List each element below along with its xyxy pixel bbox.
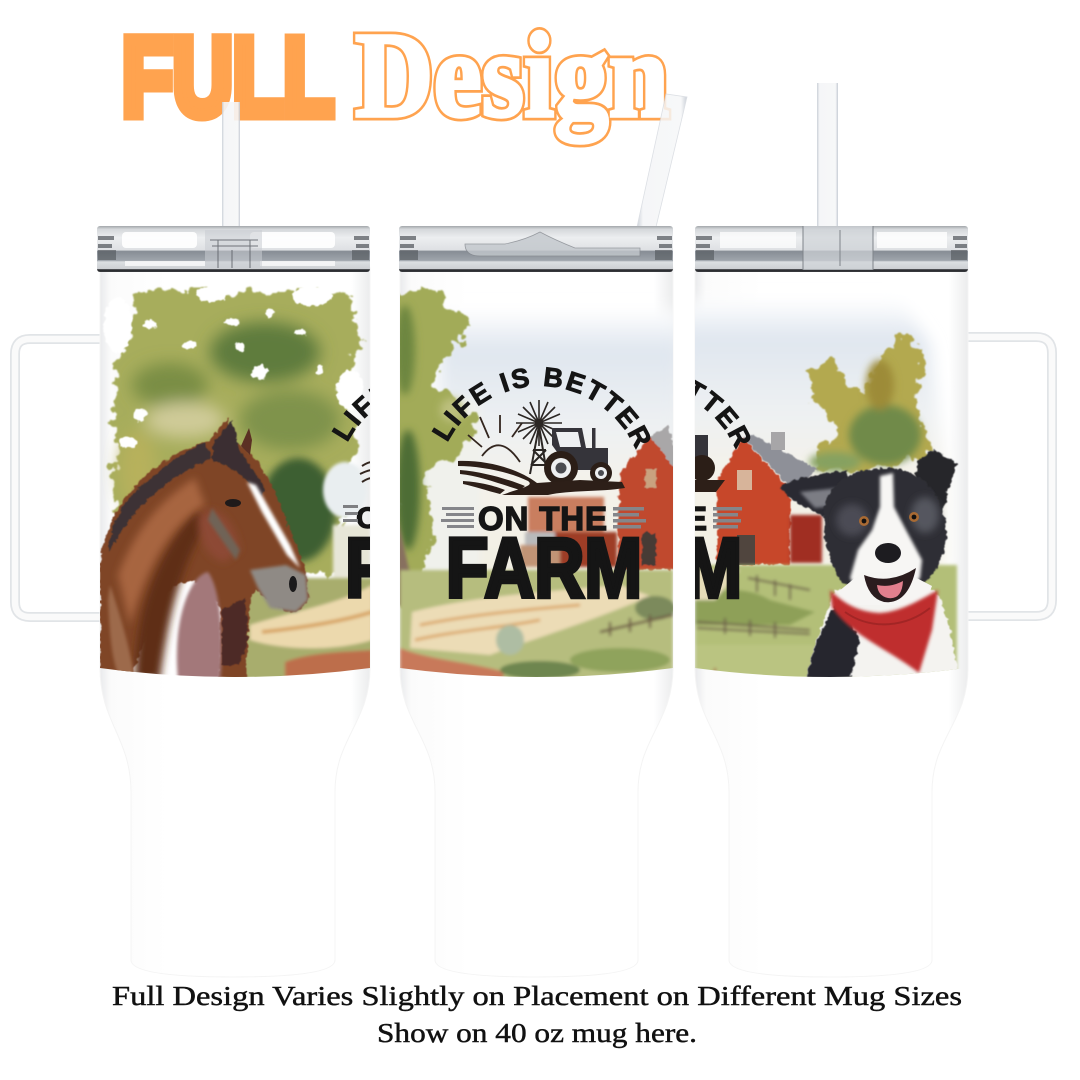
partial logo: BETTER / FARM: FARM <box>546 521 742 615</box>
plough furrows <box>458 461 625 495</box>
caption <box>112 981 962 1048</box>
printed artwork: horse and tree <box>100 286 370 677</box>
horse <box>100 418 309 680</box>
title word: Design: Design <box>355 8 669 143</box>
arc text: LIFE IS BETTER <box>432 366 650 450</box>
red barn <box>717 432 822 565</box>
tree <box>805 335 935 472</box>
ON THE: ON THE <box>478 500 607 537</box>
straw <box>817 83 838 227</box>
partial logo: BETTER / FARM: LIFE IS BETTER <box>695 380 750 450</box>
sun <box>468 415 522 462</box>
back barn <box>520 497 617 567</box>
speed lines <box>441 507 646 528</box>
mug 3: dog side <box>694 83 1057 978</box>
logo: Life Is Better On The Farm <box>432 366 650 600</box>
red barn <box>617 425 676 570</box>
partial logo: BETTER / FARM <box>695 380 750 600</box>
tumbler body <box>695 268 968 977</box>
partial logo: LIFE / FARM: LIFE IS BETTER <box>332 388 370 442</box>
windmill <box>516 400 562 474</box>
title word: Design: Design <box>355 8 669 143</box>
caption line 1: Full Design Varies Slightly on Placement on Different Mug Sizes <box>112 981 962 1011</box>
ground <box>225 578 375 683</box>
lid <box>695 226 968 272</box>
tractor <box>544 428 612 485</box>
tumbler body <box>100 268 370 977</box>
straw <box>222 102 240 227</box>
dog mouth and tongue <box>864 568 916 602</box>
red bandana <box>830 590 938 673</box>
mug 1: horse side <box>10 102 370 978</box>
distant sky gap and barn <box>323 462 370 580</box>
title: Full Design <box>122 8 669 143</box>
partial logo: BETTER / FARM: ON THE <box>578 500 707 537</box>
mug 2: logo front <box>399 94 688 978</box>
caption line 2: Show on 40 oz mug here. <box>377 1018 697 1048</box>
sky <box>440 310 680 590</box>
tumbler body <box>400 268 673 977</box>
partial logo: LIFE / FARM: FARM <box>345 521 543 615</box>
lid <box>399 226 673 272</box>
partial logo: LIFE / FARM <box>332 388 370 599</box>
ground, path and fence <box>400 570 675 684</box>
dog body <box>806 590 958 680</box>
dog <box>780 450 958 680</box>
tree canopy <box>114 292 362 575</box>
straw <box>637 94 687 227</box>
tree left <box>396 292 478 600</box>
FARM: FARM <box>446 521 642 615</box>
dog head <box>824 468 946 595</box>
lid <box>97 226 370 272</box>
printed artwork: farm scene <box>400 286 673 677</box>
title word: FULL: FULL <box>122 16 334 139</box>
printed artwork: barn and dog <box>695 302 960 677</box>
dog eyes <box>859 516 869 526</box>
sky <box>680 300 945 570</box>
canopy gaps <box>104 286 363 448</box>
dog ears <box>780 470 852 516</box>
ground and fence <box>695 565 957 682</box>
handle <box>948 337 1052 616</box>
horse nose <box>400 528 410 608</box>
partial logo: LIFE / FARM: O <box>356 502 379 535</box>
handle <box>15 339 102 617</box>
dog nose <box>875 543 901 563</box>
